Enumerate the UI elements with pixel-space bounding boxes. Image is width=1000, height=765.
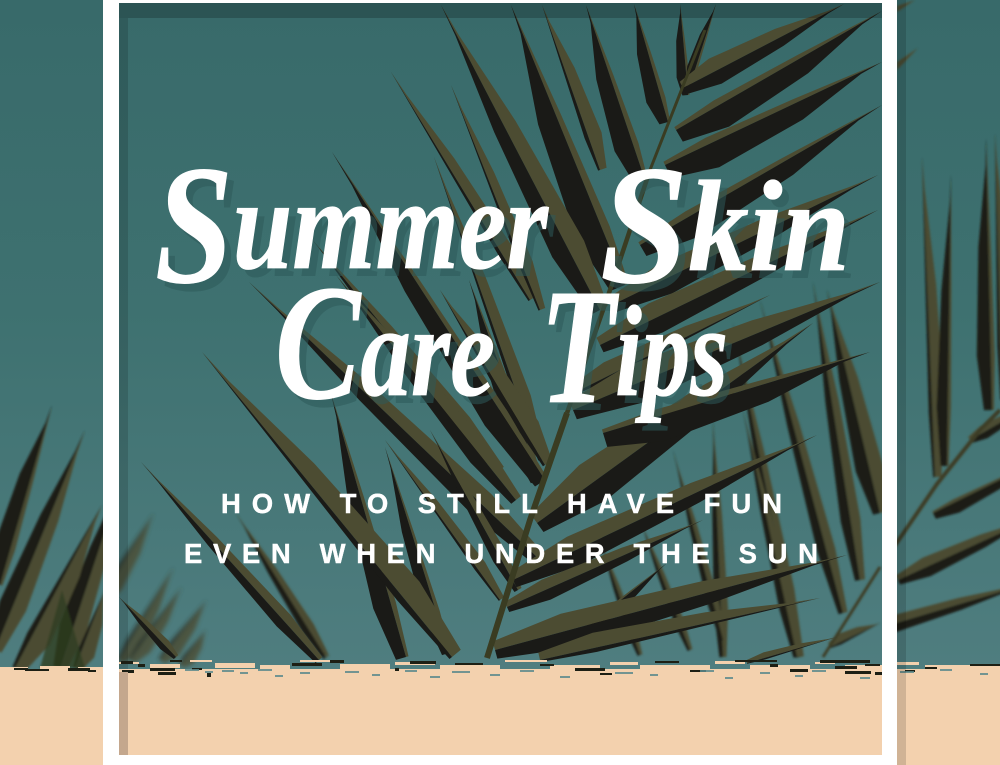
left side panel palm <box>0 407 103 669</box>
title shadow: S <box>607 139 695 327</box>
title text: S <box>600 131 688 319</box>
blurred bottom-left fronds <box>119 515 206 669</box>
title shadow: ummer <box>240 161 556 305</box>
right leaflets <box>490 0 894 667</box>
left leaflets <box>115 0 718 666</box>
brush edge: dark flecks <box>14 660 1000 677</box>
title text: are <box>360 280 495 424</box>
sand strip <box>0 660 1000 765</box>
right side panel palm <box>897 0 1000 634</box>
title shadow: are <box>367 288 502 432</box>
brush edge: teal flecks <box>185 669 988 679</box>
subtitle: HOW TO STILL HAVE FUN <box>221 488 782 519</box>
blurred background fronds <box>230 280 894 661</box>
title shadow: kin <box>695 163 857 307</box>
title shadow: T <box>547 263 627 446</box>
white frame <box>103 0 897 765</box>
rachis stem <box>487 30 705 658</box>
title shadow <box>162 139 857 446</box>
title <box>155 131 857 446</box>
subtitle <box>184 488 818 569</box>
title shadow: ips <box>622 288 735 432</box>
title text: kin <box>688 155 850 299</box>
title text <box>155 131 850 438</box>
main palm frond <box>119 3 882 669</box>
inner frame shadow <box>119 3 882 669</box>
title shadow: C <box>282 259 369 442</box>
subtitle: EVEN WHEN UNDER THE SUN <box>184 538 818 569</box>
title text: C <box>275 251 362 434</box>
brush edge: sand flecks <box>0 660 1000 669</box>
outer shadow right of frame <box>897 0 906 765</box>
inner frame sand shadow <box>119 672 128 755</box>
title text: T <box>540 255 620 438</box>
title shadow: S <box>162 139 240 327</box>
title text: ummer <box>233 153 549 297</box>
title text: S <box>155 131 233 319</box>
title text: ips <box>615 280 728 424</box>
